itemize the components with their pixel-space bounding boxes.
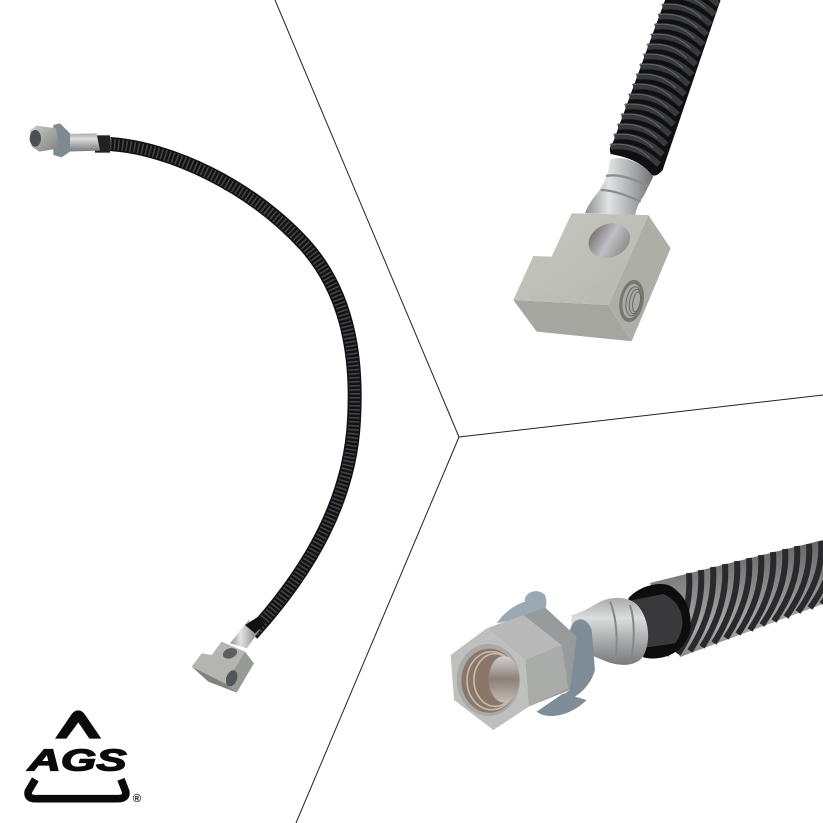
full hose product view (30, 123, 355, 693)
logo wordmark: AGS (27, 744, 127, 778)
logo chevron (55, 710, 101, 739)
block front face (513, 213, 648, 305)
washer wings (497, 591, 546, 623)
corrugated hose body (110, 144, 355, 634)
block bottom face (513, 300, 632, 341)
crimped ferrule (585, 158, 653, 215)
close-up: block fitting (513, 0, 722, 341)
nut side flange (525, 607, 577, 707)
nut top face (487, 615, 562, 661)
inner hose (630, 594, 682, 647)
threaded hole (616, 278, 647, 324)
nut front face (451, 628, 529, 730)
threaded bore (457, 644, 520, 716)
registered mark: ® (133, 793, 142, 805)
nut side face (525, 645, 568, 707)
fitting: hex nut end (30, 123, 110, 157)
crimped ferrule (572, 598, 648, 665)
block right face (608, 215, 671, 341)
corrugated hose (650, 535, 823, 657)
through hole (583, 217, 635, 264)
corrugated hose (610, 0, 722, 176)
logo base bracket (28, 779, 126, 799)
fitting: block end (192, 617, 265, 693)
divider lines (275, 0, 823, 823)
hose opening (628, 584, 691, 658)
close-up: hex nut fitting (451, 535, 823, 730)
AGS logo (27, 710, 142, 805)
